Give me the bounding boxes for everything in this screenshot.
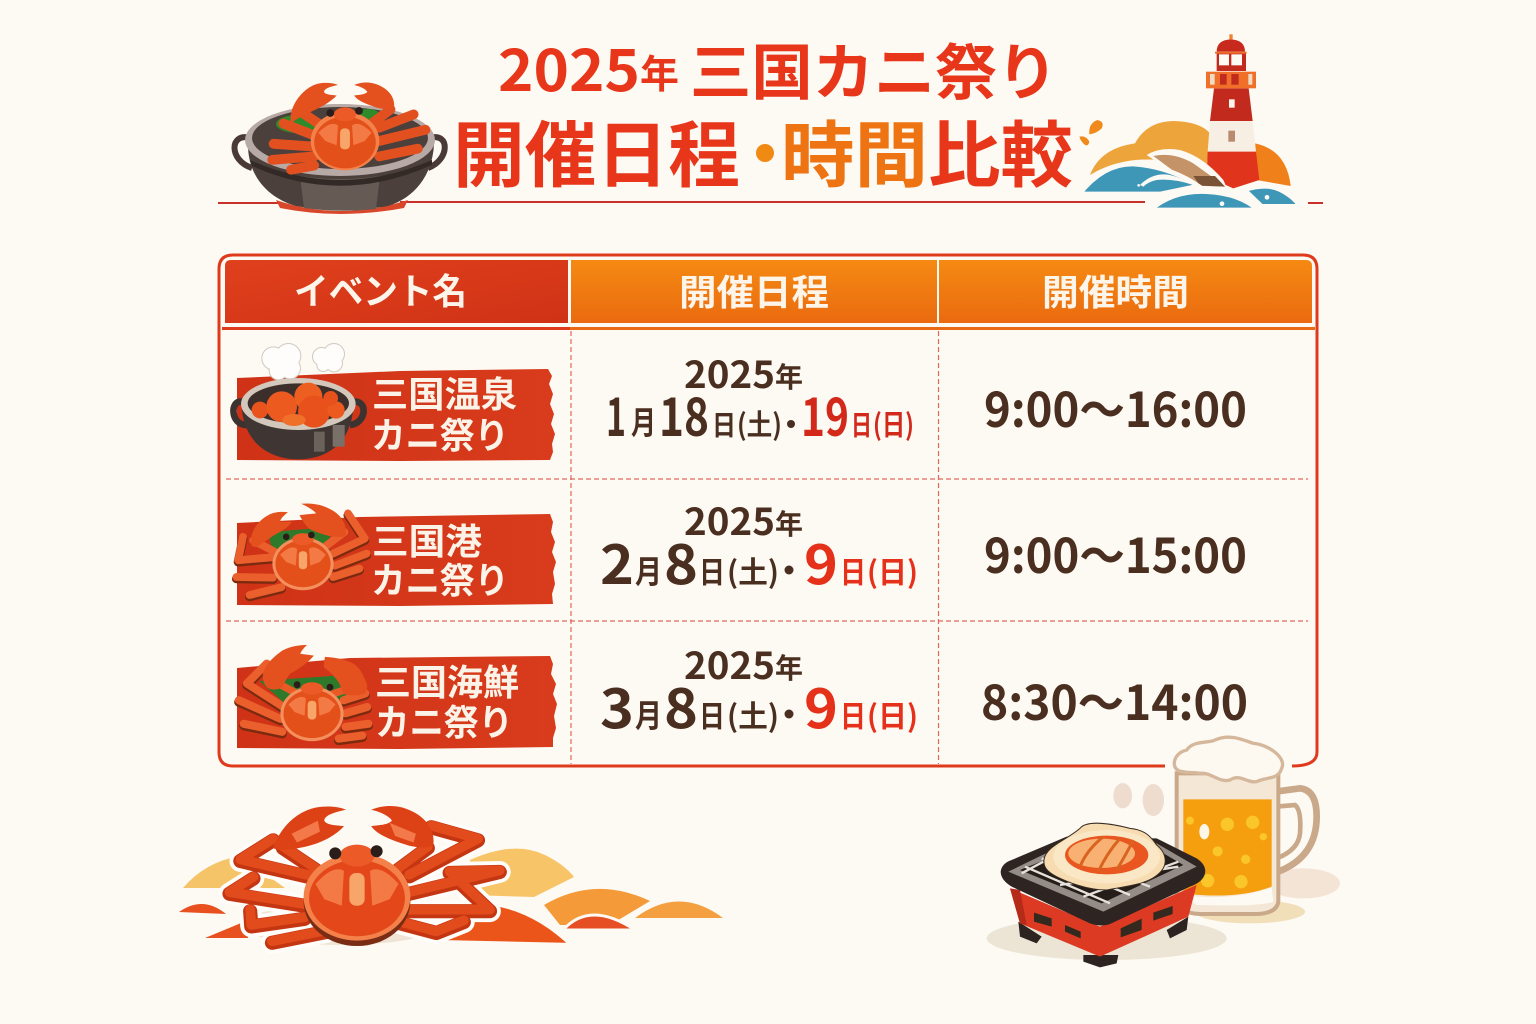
date: 日 — [840, 548, 866, 592]
header cell: dates — [571, 260, 937, 323]
date: 9 — [804, 665, 838, 744]
title line 1: 2025 — [498, 26, 640, 108]
date — [600, 492, 918, 600]
icon: snow crab — [236, 503, 367, 597]
splash drops — [1079, 120, 1103, 145]
date: 2025 — [684, 636, 775, 690]
title underline — [218, 201, 1323, 204]
hills — [1090, 121, 1291, 186]
date: 年 — [775, 356, 803, 396]
tower — [1206, 34, 1259, 188]
title line 2: 比較 — [928, 97, 1073, 202]
date: 月 — [635, 691, 662, 737]
crab — [272, 83, 426, 170]
date: (日) — [873, 402, 914, 444]
date: 9 — [804, 521, 838, 600]
banner: 三国港カニ祭り: カニ祭り — [371, 552, 509, 604]
illustration: crab on waves — [179, 806, 723, 946]
date: 2025 — [684, 345, 775, 399]
table — [222, 260, 1315, 764]
date: 19 — [801, 376, 849, 451]
row 1 — [233, 344, 1247, 461]
title line 2: 時間 — [781, 97, 928, 202]
date: 月 — [635, 547, 662, 593]
row 2 — [236, 492, 1247, 606]
header cell: event name: イベント名 — [294, 271, 467, 312]
header cell: times: 開催時間 — [1042, 272, 1189, 313]
banner: 三国温泉カニ祭り: 三国温泉 — [372, 366, 517, 418]
date: 年 — [775, 503, 803, 543]
row 3 — [237, 636, 1248, 749]
date: 日 — [851, 404, 872, 444]
date: 1 — [606, 376, 626, 451]
banner: 三国温泉カニ祭り: カニ祭り — [371, 407, 509, 459]
steam clouds — [262, 344, 344, 379]
date: 18 — [659, 376, 709, 451]
header row — [222, 260, 1315, 330]
date: 8 — [664, 665, 698, 744]
banner: 三国港カニ祭り — [236, 503, 556, 606]
icon: crab pot — [233, 344, 364, 459]
table frame — [219, 255, 1317, 766]
big crab — [229, 806, 500, 946]
date — [600, 636, 918, 744]
date: (日) — [867, 548, 918, 592]
time: 9:00～16:00 — [984, 371, 1247, 441]
title line 1: 年 — [640, 44, 679, 100]
banner: 三国港カニ祭り: 三国港 — [372, 513, 482, 565]
date: (日) — [867, 692, 918, 736]
banner: 三国海鮮カニ祭り — [237, 645, 557, 749]
wave hills — [179, 849, 723, 946]
illustration: beer and grilled scallop — [987, 737, 1340, 967]
date — [606, 345, 914, 451]
shadows — [987, 783, 1340, 960]
pot — [234, 104, 445, 214]
date: (土) — [727, 548, 779, 592]
title line 2 — [453, 97, 1073, 202]
date: 日 — [699, 548, 725, 592]
beer mug — [1174, 737, 1317, 914]
title line 2: 開催日程 — [453, 97, 740, 202]
grill — [1001, 823, 1205, 967]
icon: crab in hot pot — [234, 83, 445, 214]
date: 年 — [775, 647, 803, 687]
waves — [1079, 149, 1299, 210]
date: 2025 — [684, 492, 775, 546]
header cell: event name — [225, 260, 568, 323]
banner: 三国海鮮カニ祭り: 三国海鮮 — [375, 654, 519, 706]
date: 2 — [600, 521, 634, 600]
banner: 三国海鮮カニ祭り: カニ祭り — [375, 694, 513, 746]
date: 日 — [712, 404, 736, 444]
icon: lighthouse and waves — [1079, 34, 1299, 210]
banner: 三国温泉カニ祭り — [233, 344, 555, 461]
time: 8:30～14:00 — [981, 664, 1248, 734]
date: 3 — [600, 665, 634, 744]
title line 1: 三国カニ祭り — [690, 23, 1058, 112]
date: 日 — [699, 692, 725, 736]
header cell: dates: 開催日程 — [679, 272, 829, 313]
date: (土) — [737, 402, 782, 444]
date: 月 — [631, 398, 656, 444]
icon: snow crab with greens — [239, 645, 368, 741]
date: (土) — [727, 692, 779, 736]
time: 9:00～15:00 — [984, 517, 1247, 587]
date: 日 — [840, 692, 866, 736]
date: 8 — [664, 521, 698, 600]
title line 1 — [498, 23, 1058, 112]
header cell: times — [939, 260, 1312, 323]
title block — [453, 23, 1073, 202]
